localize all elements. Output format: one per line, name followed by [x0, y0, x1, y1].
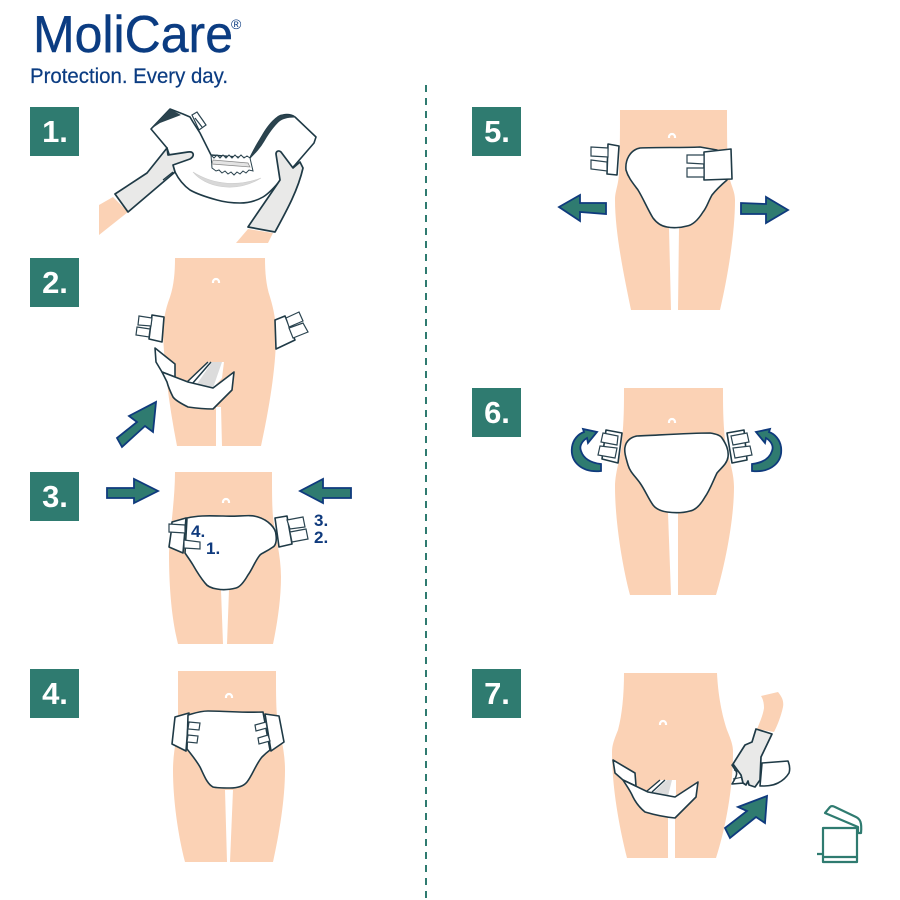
badge 4: 4. [42, 676, 68, 711]
right wing and tabs [275, 516, 308, 547]
glove [733, 729, 772, 787]
badge 5: 5. [484, 114, 510, 149]
product [625, 433, 728, 513]
forearm [757, 692, 783, 732]
forearm skin [99, 197, 273, 243]
tabs [187, 722, 270, 744]
step 6 [472, 388, 781, 595]
tab 4 [169, 524, 185, 533]
rolled product [732, 761, 790, 786]
body with product placed between legs [136, 258, 308, 446]
badge 7 [472, 669, 521, 718]
badge 2 [30, 258, 79, 307]
logo: MoliCare: MoliCare [33, 6, 233, 64]
arrow right [741, 197, 788, 223]
left wing and tabs [136, 315, 164, 342]
badge 3: 3. [42, 479, 68, 514]
navel [669, 134, 675, 138]
arrow [725, 796, 767, 838]
badge 1 [30, 107, 79, 156]
torso [612, 673, 733, 858]
badge 5 [472, 107, 521, 156]
body with fastened product [172, 671, 285, 862]
closure number labels [191, 511, 328, 558]
arrow right [107, 479, 158, 503]
body with product and folded tabs [598, 388, 752, 595]
illustration: unfolding the product with gloved hands [99, 109, 316, 243]
tagline: Protection. Every day. [30, 65, 228, 88]
product flaps [613, 760, 636, 786]
badge 6: 6. [484, 395, 510, 430]
badge 1: 1. [42, 114, 68, 149]
hand disposing of rolled product [732, 692, 790, 787]
torso [615, 110, 735, 310]
torso [169, 472, 281, 644]
right wing and tabs [727, 430, 752, 463]
step 3 [30, 472, 351, 644]
logo: MoliCare: ® [231, 16, 242, 32]
closure number labels: 3. [314, 511, 328, 530]
right tabs [687, 155, 704, 177]
step 4 [30, 669, 285, 862]
badge 4 [30, 669, 79, 718]
body with product held up [591, 110, 735, 310]
curved arrow left [572, 429, 601, 471]
navel [669, 419, 675, 423]
badge 6 [472, 388, 521, 437]
dark edges [151, 109, 181, 129]
left wing and tabs [598, 430, 622, 463]
arrow left [300, 479, 351, 503]
left wing and tabs [591, 144, 619, 175]
icon: waste bin [817, 806, 861, 862]
curved arrow right [752, 429, 781, 471]
product [626, 147, 727, 228]
torso [163, 258, 276, 446]
left wing [169, 518, 186, 553]
body with product [169, 472, 328, 644]
arrow [117, 402, 156, 447]
torso [173, 671, 285, 862]
badge 3 [30, 472, 79, 521]
product [187, 711, 270, 788]
arrow left [559, 195, 606, 221]
right wing [704, 149, 732, 180]
product [185, 516, 276, 590]
product front flap [155, 348, 175, 377]
product inner [647, 780, 676, 797]
tab 1 [184, 540, 200, 549]
navel [660, 721, 666, 725]
step 1 [30, 107, 316, 243]
leak guard ruffle [211, 155, 253, 175]
closure number labels: 1. [206, 539, 220, 558]
step 2 [30, 258, 308, 447]
step 5 [472, 107, 788, 310]
badge 7: 7. [484, 676, 510, 711]
closure number labels: 2. [314, 528, 328, 547]
navel [213, 279, 219, 283]
dashed column divider [425, 85, 427, 900]
wings [172, 713, 284, 751]
right wing and tabs [275, 312, 308, 349]
crease [193, 172, 261, 187]
tab [192, 112, 206, 130]
step 7 [472, 669, 861, 862]
left glove [115, 148, 193, 212]
navel [223, 499, 229, 503]
torso [615, 388, 734, 595]
right glove [248, 151, 303, 232]
product body [151, 109, 316, 203]
body with product removed [612, 673, 733, 858]
closure number labels: 4. [191, 522, 205, 541]
navel [226, 694, 232, 698]
product inner [187, 362, 224, 388]
badge 2: 2. [42, 265, 68, 300]
